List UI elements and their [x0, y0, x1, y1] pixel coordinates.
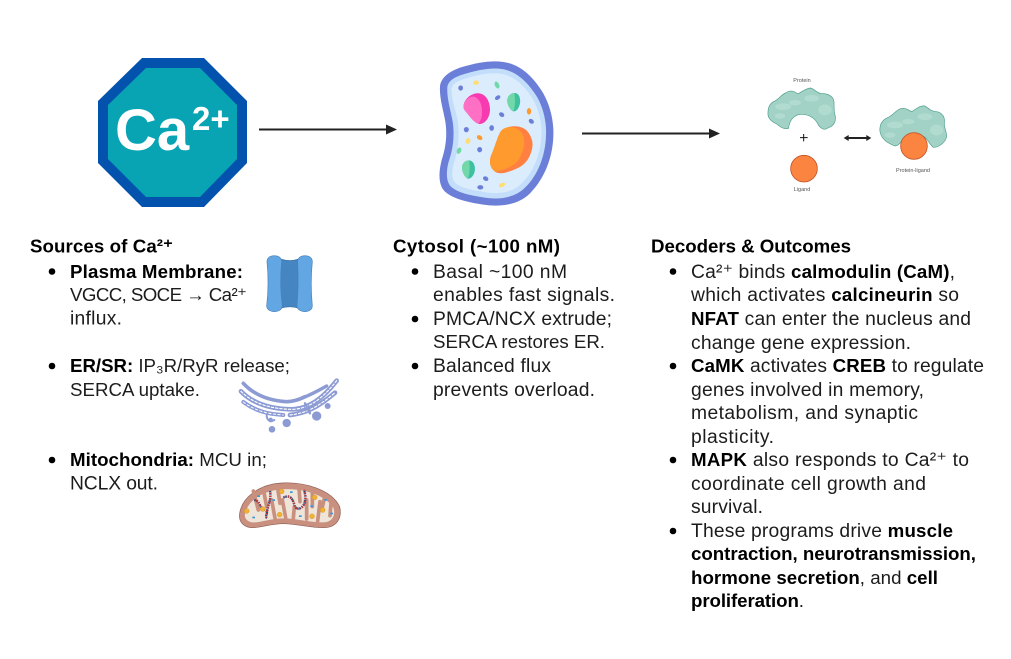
text block: plasma membrane: Plasma Membrane: — [70, 261, 243, 282]
text block: CaMK pathway: CaMK activates CREB to regulate — [691, 355, 984, 377]
icon: cell — [439, 61, 553, 206]
icon: endoplasmic reticulum — [241, 381, 337, 433]
text block: CaMK pathway: metabolism, and synaptic — [691, 403, 918, 424]
column: sources of Ca2+ — [30, 236, 290, 494]
text block: basal level: Basal ~100 nM — [433, 262, 567, 283]
pink organelle — [463, 93, 490, 124]
text block: basal level: enables fast signals. — [433, 285, 615, 306]
icon: mitochondrion — [239, 483, 340, 528]
arrow: sources to cytosol — [259, 124, 397, 134]
icon: calcium ion octagon: Ca — [115, 98, 190, 163]
text block: extrusion: SERCA restores ER. — [433, 331, 605, 352]
icon: protein and ligand binding — [768, 88, 947, 182]
text block: extrusion — [412, 309, 612, 352]
plus sign — [800, 134, 808, 141]
text block: plasma membrane: influx. — [70, 308, 122, 330]
text block: calmodulin pathway: which activates calcineurin so — [690, 284, 959, 306]
text block: ER/SR: ER/SR: IP₃R/RyR release; — [70, 355, 290, 376]
icon: calcium ion octagon: 2+ — [192, 100, 230, 137]
label: protein-ligand: Protein-ligand — [896, 168, 930, 174]
double arrow — [844, 135, 871, 141]
text block: CaMK pathway — [670, 355, 984, 448]
free ligand — [791, 155, 817, 182]
text block: outcomes: hormone secretion, and cell — [691, 567, 938, 588]
text block: balanced flux: prevents overload. — [433, 380, 595, 401]
heading: decoders: Decoders & Outcomes — [651, 236, 851, 256]
icon: calcium ion octagon — [98, 58, 247, 207]
text block: calmodulin pathway: change gene expression. — [691, 333, 911, 354]
text block: outcomes: These programs drive muscle — [691, 520, 953, 542]
green organelles — [507, 93, 520, 111]
text block: outcomes: proliferation. — [691, 590, 804, 611]
text block: balanced flux: Balanced flux — [433, 356, 551, 377]
text block: CaMK pathway: genes involved in memory, — [691, 380, 924, 401]
text block: plasma membrane: VGCC, SOCE → Ca²⁺ — [70, 284, 247, 305]
text block: mitochondria: NCLX out. — [70, 474, 158, 494]
text block: MAPK pathway: MAPK also responds to Ca²⁺ to — [691, 449, 969, 471]
text block: outcomes — [670, 520, 976, 611]
bound protein — [880, 106, 947, 147]
text block: CaMK pathway: plasticity. — [691, 427, 774, 448]
text block: MAPK pathway: coordinate cell growth and — [691, 474, 926, 495]
text block: mitochondria: Mitochondria: MCU in; — [70, 449, 267, 470]
column: cytosol — [393, 236, 615, 401]
text block: balanced flux — [412, 356, 595, 401]
text block: calmodulin pathway: NFAT can enter the nucleus and — [691, 308, 971, 330]
text block: basal level — [412, 262, 615, 306]
label: protein: Protein — [793, 78, 811, 84]
small vesicles — [458, 85, 535, 189]
nucleus — [490, 126, 533, 173]
heading: sources: Sources of Ca²⁺ — [30, 236, 173, 256]
text block: outcomes: contraction, neurotransmission, — [691, 543, 976, 564]
text block: MAPK pathway: survival. — [691, 497, 763, 518]
text block: MAPK pathway — [670, 449, 969, 518]
column: decoders and outcomes — [651, 236, 984, 611]
label: ligand: Ligand — [794, 187, 810, 193]
arrow: cytosol to decoders — [582, 128, 720, 138]
text block: extrusion: PMCA/NCX extrude; — [433, 309, 612, 330]
text block: calmodulin pathway: Ca²⁺ binds calmodulin (CaM), — [691, 261, 955, 283]
text block: ER/SR: SERCA uptake. — [70, 379, 200, 400]
text block: ER/SR — [49, 355, 290, 400]
text block: calmodulin pathway — [670, 261, 971, 354]
heading: cytosol: Cytosol (~100 nM) — [393, 236, 560, 256]
free protein — [768, 88, 836, 129]
text block: mitochondria — [49, 449, 267, 494]
text block: plasma membrane — [49, 261, 247, 330]
icon: membrane channel — [267, 256, 312, 312]
bound ligand — [901, 133, 927, 159]
